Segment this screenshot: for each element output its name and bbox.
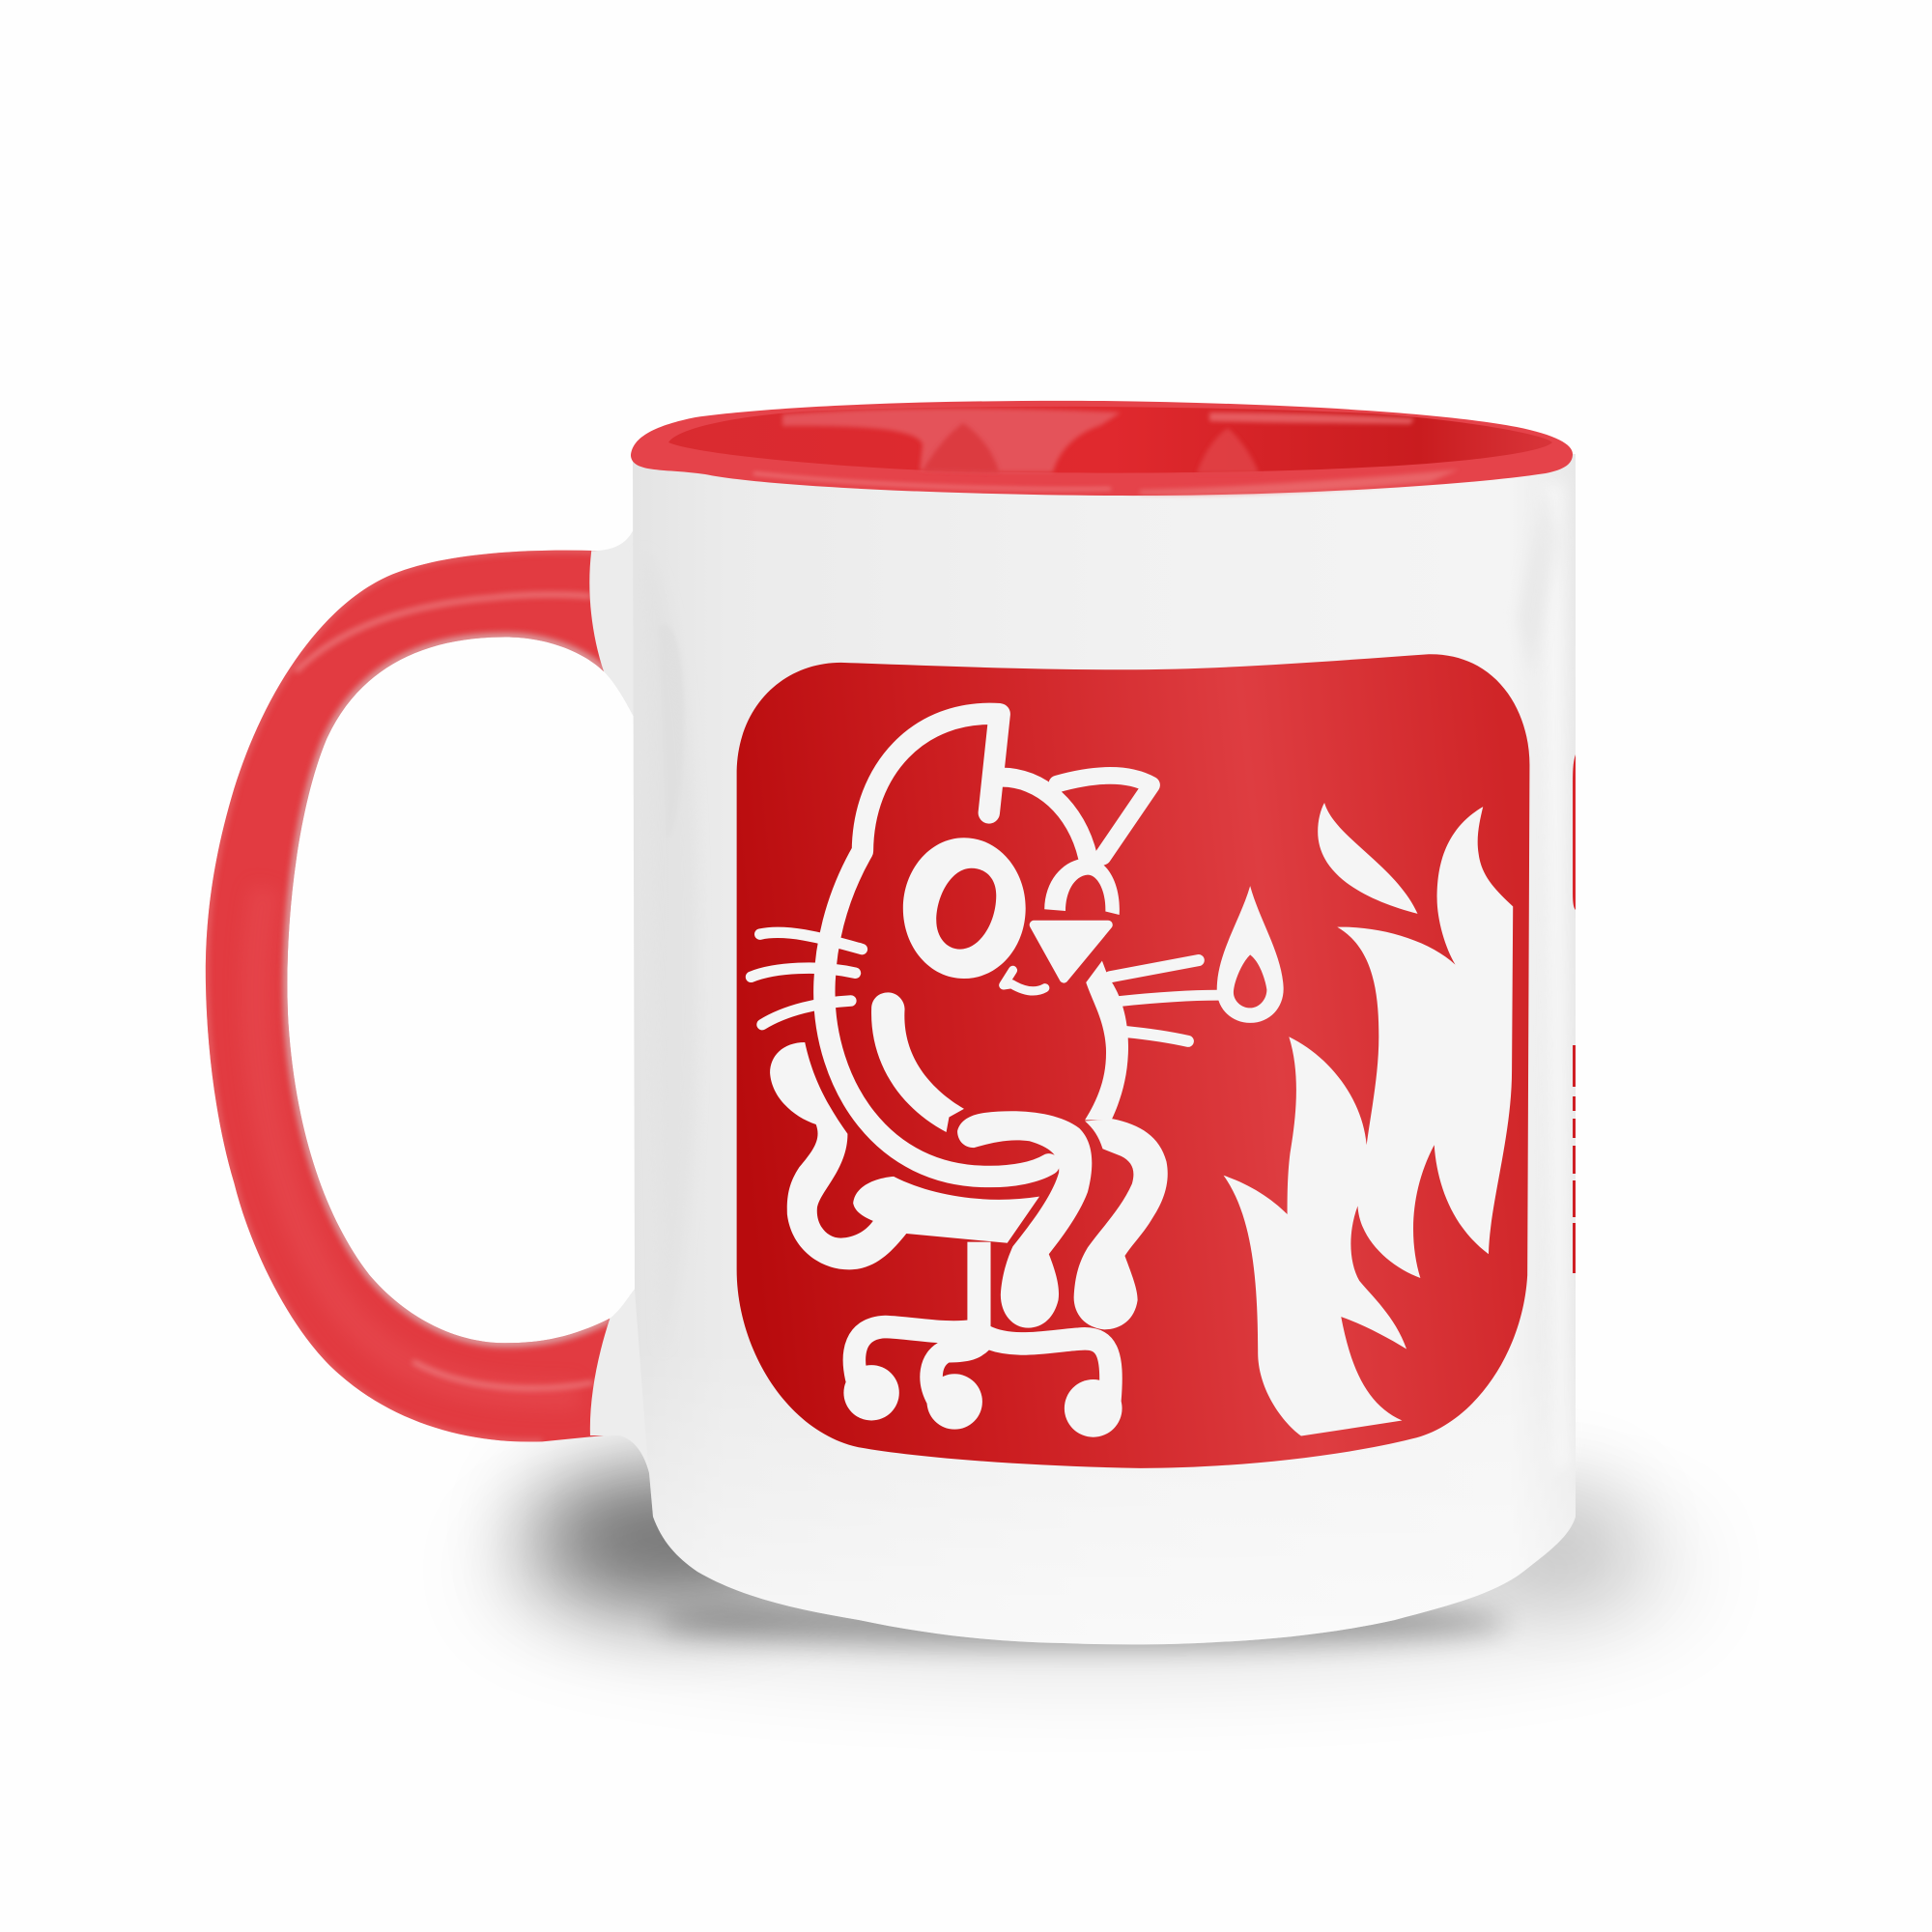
right pale band	[1209, 412, 1414, 424]
cat ear outer	[1057, 776, 1151, 857]
handle shading	[206, 551, 610, 1442]
near leg	[957, 1111, 1092, 1328]
handle	[206, 529, 666, 1497]
far leg	[1074, 1119, 1168, 1329]
cheek and chest line	[1085, 961, 1128, 1120]
ground shadow	[493, 1468, 1690, 1657]
whiskers	[752, 932, 1218, 1041]
cat ear	[1000, 778, 1088, 857]
chair pole	[967, 1242, 991, 1331]
small flame tip	[1318, 803, 1418, 914]
mug interior	[668, 407, 1552, 473]
wrap-around print fragments on right edge	[1573, 754, 1576, 1273]
product scene: mug	[205, 400, 1690, 1694]
printed artwork panel	[737, 654, 1529, 1468]
water drop	[1217, 886, 1284, 1023]
interior reflections	[782, 409, 1414, 473]
red rounded panel	[737, 654, 1529, 1468]
wrapped text sliver	[1573, 1045, 1576, 1273]
mug base highlight	[633, 454, 1576, 1644]
chair wheels	[843, 1365, 1122, 1437]
mug body	[633, 454, 1576, 1644]
pale reflection	[782, 409, 1121, 472]
smile	[1004, 970, 1045, 991]
arm	[871, 992, 964, 1132]
tail and chair seat	[770, 1042, 1039, 1269]
handle bottom highlight	[412, 1361, 594, 1388]
handle body	[206, 551, 610, 1442]
chair base	[854, 1326, 1111, 1400]
handle outer edge	[206, 551, 598, 1442]
rim	[631, 401, 1573, 496]
handle top connector	[589, 529, 659, 739]
handle bottom connector	[590, 1288, 666, 1497]
cat back and head outline	[824, 714, 1049, 1177]
main flames	[1224, 807, 1513, 1436]
winking eye	[1044, 858, 1120, 915]
right wedge	[1197, 428, 1259, 473]
rim highlight	[753, 473, 1111, 489]
cat illustration	[752, 714, 1284, 1437]
big eye	[903, 838, 1026, 979]
nose	[1034, 924, 1108, 979]
handle top highlight	[296, 595, 591, 671]
wrapped panel sliver	[1573, 754, 1576, 910]
handle inner edge	[287, 637, 610, 1343]
handle soft centre band	[256, 887, 579, 1395]
rim outer lip	[631, 401, 1573, 496]
body reflections	[642, 483, 1570, 1468]
dark tongue	[923, 423, 999, 472]
flame illustration	[1224, 803, 1513, 1436]
